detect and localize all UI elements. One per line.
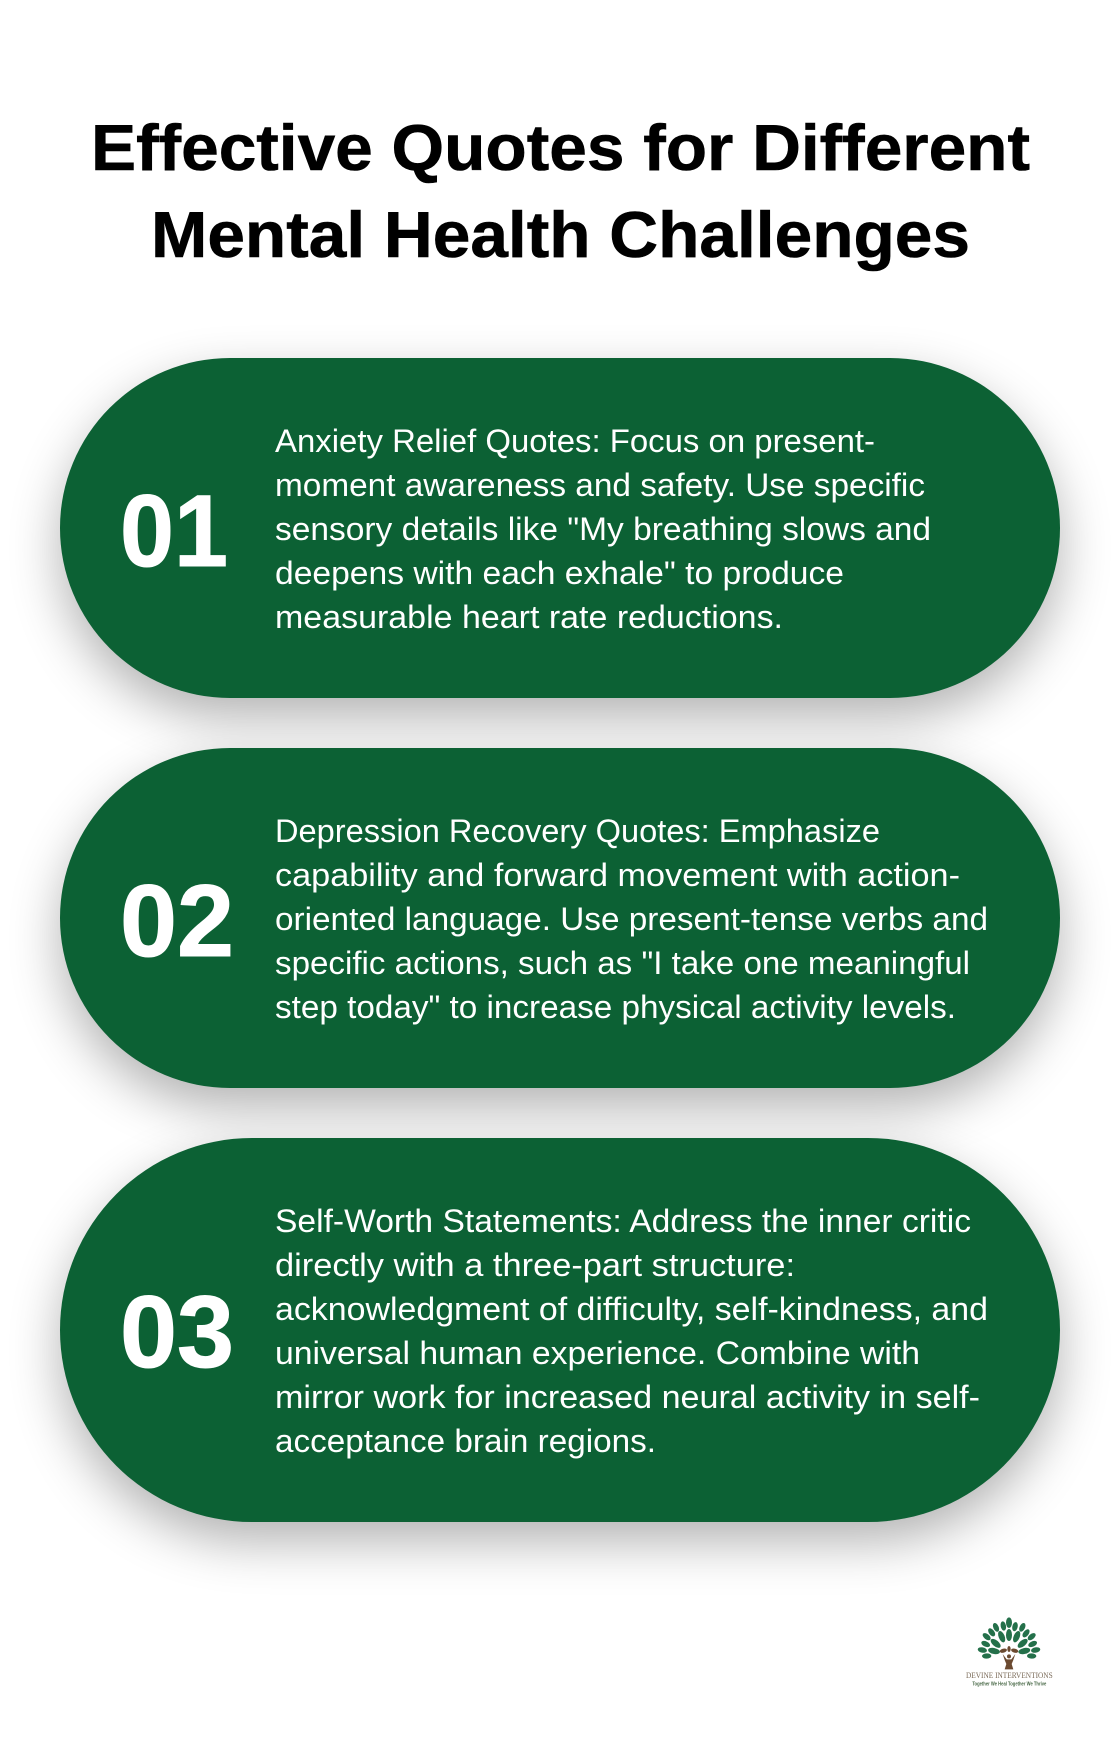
text: depression recovery description: step today" to increase physical activity levels. bbox=[275, 989, 956, 1025]
text: anxiety relief description bbox=[275, 423, 931, 635]
title: Mental Health Challenges bbox=[151, 198, 970, 271]
title bbox=[91, 111, 1030, 272]
logo name: DEVINE INTERVENTIONS bbox=[966, 1671, 1053, 1680]
text: depression recovery description: oriented language. Use present-tense verbs and bbox=[275, 901, 988, 937]
panel: depression recovery quotes bbox=[60, 748, 1060, 1088]
number 01: 01 bbox=[120, 474, 228, 588]
text: anxiety relief description: moment awareness and safety. Use specific bbox=[275, 467, 925, 503]
text: depression recovery description: Depression Recovery Quotes: Emphasize bbox=[275, 813, 880, 849]
text: self-worth description: Self-Worth Statements: Address the inner critic bbox=[275, 1203, 971, 1239]
text: self-worth description: acceptance brain regions. bbox=[275, 1423, 656, 1459]
text: depression recovery description: capability and forward movement with action- bbox=[275, 857, 960, 893]
logo tagline: Together We Heal Together We Thrive bbox=[972, 1682, 1047, 1688]
text: depression recovery description: specific actions, such as "I take one meaningful bbox=[275, 945, 970, 981]
text: self-worth description bbox=[275, 1203, 988, 1459]
text: self-worth description: universal human experience. Combine with bbox=[275, 1335, 920, 1371]
text: anxiety relief description: deepens with each exhale" to produce bbox=[275, 555, 844, 591]
text: anxiety relief description: sensory details like "My breathing slows and bbox=[275, 511, 931, 547]
icon: tree leaves bbox=[977, 1617, 1041, 1659]
text: anxiety relief description: Anxiety Relief Quotes: Focus on present- bbox=[275, 423, 875, 459]
number 03: 03 bbox=[120, 1275, 234, 1389]
panel: anxiety relief quotes bbox=[60, 358, 1060, 698]
title: Effective Quotes for Different bbox=[91, 111, 1030, 184]
text: self-worth description: mirror work for increased neural activity in self- bbox=[275, 1379, 980, 1415]
text: anxiety relief description: measurable heart rate reductions. bbox=[275, 599, 783, 635]
icon: person trunk bbox=[999, 1646, 1019, 1669]
text: self-worth description: directly with a three-part structure: bbox=[275, 1247, 795, 1283]
text: depression recovery description bbox=[275, 813, 988, 1025]
logo: Devine Interventions bbox=[966, 1617, 1053, 1688]
text: self-worth description: acknowledgment of difficulty, self-kindness, and bbox=[275, 1291, 988, 1327]
panel: self-worth statements bbox=[60, 1138, 1060, 1522]
number 02: 02 bbox=[120, 864, 234, 978]
